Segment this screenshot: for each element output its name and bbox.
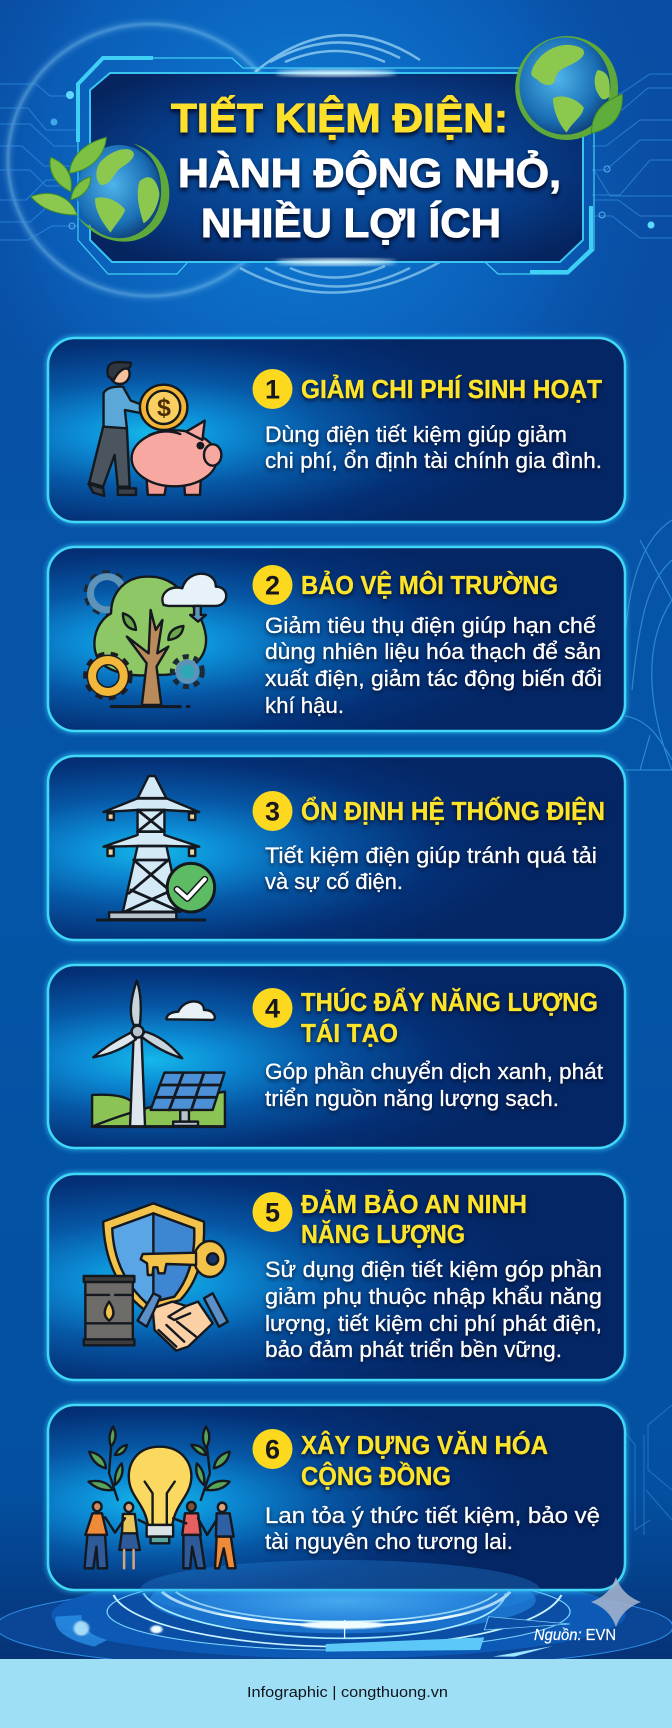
heading 5: NĂNG LƯỢNG: [301, 1219, 465, 1249]
body 5: [265, 1257, 602, 1362]
icon: sparkle watermark: [591, 1577, 641, 1627]
number badge 6: [252, 1429, 292, 1469]
icon: power tower with check: [97, 776, 215, 920]
body 2: xuất điện, giảm tác động biến đổi: [265, 666, 602, 691]
title text: HÀNH ĐỘNG NHỎ,: [178, 150, 561, 196]
body 2: khí hậu.: [265, 693, 344, 718]
source credit: Nguồn: EVN: [534, 1627, 616, 1644]
card 4: promote renewable energy: [48, 965, 625, 1148]
number badge 5: [252, 1192, 292, 1232]
title text: NHIỀU LỢI ÍCH: [201, 200, 501, 246]
body 1: [265, 422, 602, 473]
body 4: [265, 1059, 603, 1111]
number badge 5: 5: [265, 1198, 280, 1228]
coin dollar sign: $: [157, 394, 171, 422]
icon: wind turbine and solar panel: [92, 981, 225, 1127]
body 5: bảo đảm phát triển bền vững.: [265, 1337, 562, 1362]
body 2: [265, 613, 602, 718]
number badge 4: 4: [265, 994, 280, 1024]
number badge 4: [252, 988, 292, 1028]
body 5: giảm phụ thuộc nhập khẩu năng: [265, 1284, 602, 1309]
icon: light bulb, plants and people: [85, 1427, 236, 1568]
body 1: chi phí, ổn định tài chính gia đình.: [265, 448, 602, 473]
title text: TIẾT KIỆM ĐIỆN:: [171, 95, 508, 141]
number badge 2: 2: [265, 570, 280, 600]
body 6: Lan tỏa ý thức tiết kiệm, bảo vệ: [265, 1503, 600, 1528]
icon: globe top right: [515, 36, 622, 140]
heading 2: BẢO VỆ MÔI TRƯỜNG: [301, 570, 558, 600]
heading 4: TÁI TẠO: [301, 1018, 398, 1048]
body 3: và sự cố điện.: [265, 869, 403, 894]
title text: [171, 95, 561, 246]
heading 6: CỘNG ĐỒNG: [301, 1461, 451, 1491]
card 6: build a community culture: [48, 1405, 625, 1620]
heading 5: ĐẢM BẢO AN NINH: [301, 1189, 527, 1219]
body 2: dùng nhiên liệu hóa thạch để sản: [265, 639, 601, 664]
body 3: [265, 843, 597, 894]
body 1: Dùng điện tiết kiệm giúp giảm: [265, 422, 567, 447]
heading 5: [301, 1189, 527, 1249]
icon: tree with gears and cloud: [86, 573, 226, 707]
body 5: lượng, tiết kiệm chi phí phát điện,: [265, 1311, 602, 1336]
body 6: tài nguyên cho tương lai.: [265, 1529, 513, 1554]
body 6: [265, 1503, 600, 1554]
number badge 2: [252, 565, 292, 605]
body 5: Sử dụng điện tiết kiệm góp phần: [265, 1257, 602, 1282]
number badge 1: [252, 369, 292, 409]
body 3: Tiết kiệm điện giúp tránh quá tải: [265, 843, 597, 868]
card 2: protect the environment: [48, 547, 625, 731]
number badge 3: [252, 791, 292, 831]
card 3: stabilise the power system: [48, 756, 625, 940]
icon: shield, key, barrel and handshake: [84, 1203, 228, 1351]
heading 4: [301, 987, 598, 1048]
card 1: reduce living costs: [48, 338, 625, 522]
heading 1: GIẢM CHI PHÍ SINH HOẠT: [301, 374, 602, 404]
heading 6: [301, 1430, 548, 1491]
footer bar: Infographic | congthuong.vn: [247, 1684, 448, 1701]
heading 6: XÂY DỰNG VĂN HÓA: [301, 1430, 548, 1460]
body 4: triển nguồn năng lượng sạch.: [265, 1086, 559, 1111]
heading 3: ỔN ĐỊNH HỆ THỐNG ĐIỆN: [301, 796, 605, 826]
bottom glowing platform: [0, 1567, 672, 1670]
body 4: Góp phần chuyển dịch xanh, phát: [265, 1059, 603, 1084]
card 5: ensure energy security: [48, 1174, 625, 1380]
number badge 1: 1: [265, 374, 280, 404]
icon: globe with leaves left: [31, 137, 169, 242]
number badge 3: 3: [265, 796, 280, 826]
icon: person with piggy bank: [89, 362, 221, 496]
body 2: Giảm tiêu thụ điện giúp hạn chế: [265, 613, 596, 638]
footer bar: [0, 1659, 672, 1728]
number badge 6: 6: [265, 1434, 280, 1464]
title panel: [78, 58, 594, 274]
heading 4: THÚC ĐẨY NĂNG LƯỢNG: [301, 987, 598, 1017]
